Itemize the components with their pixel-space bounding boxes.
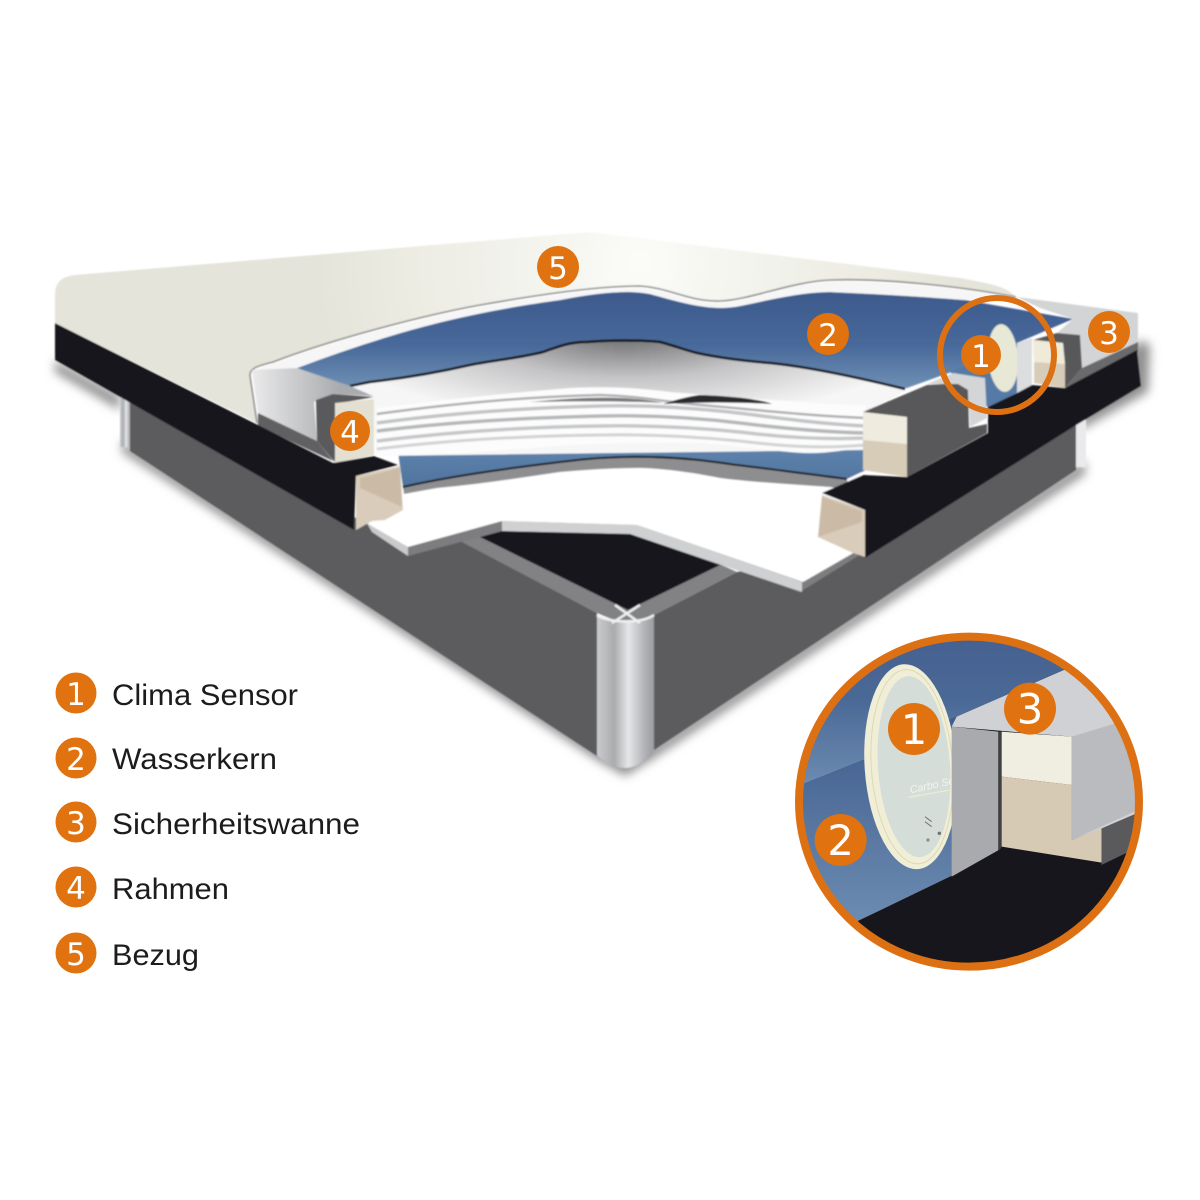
legend item 3: Sicherheitswanne <box>112 808 360 841</box>
inset dark block <box>1102 814 1134 865</box>
legend item 4: 4 <box>66 871 86 907</box>
black floor <box>480 531 720 610</box>
badge 2 <box>807 313 849 355</box>
left black band <box>55 323 398 530</box>
detail inset circle <box>795 632 1143 971</box>
left tan channel <box>356 466 403 530</box>
legend item 1: 1 <box>66 677 86 713</box>
inset tan face <box>1002 777 1102 863</box>
inset badge 2: 2 <box>827 816 854 865</box>
base shadow <box>55 340 1150 776</box>
inset clima sensor <box>864 664 952 870</box>
legend item 1: Clima Sensor <box>112 679 298 712</box>
lower water core <box>398 445 866 487</box>
right black band <box>822 350 1141 558</box>
inset background <box>804 670 1126 922</box>
badge 2: 2 <box>818 318 838 354</box>
badge 1 <box>961 335 1001 375</box>
inset badge 1: 1 <box>901 705 927 754</box>
badge 5: 5 <box>548 251 568 287</box>
right base wall <box>654 425 1076 750</box>
legend item 1 <box>56 672 298 714</box>
inset grey panel left <box>952 727 998 877</box>
badge 4: 4 <box>340 415 360 451</box>
badge 4 <box>330 411 370 451</box>
lower mattress edge <box>403 457 850 494</box>
inset blue lower band <box>803 716 957 921</box>
frame block: back right <box>1033 333 1082 388</box>
inset orange ring <box>799 637 1139 967</box>
inset black band <box>858 849 1126 921</box>
badge 3: 3 <box>1099 316 1119 352</box>
back silver rail <box>1017 297 1138 368</box>
foam board <box>365 458 862 592</box>
left corner post <box>120 392 131 447</box>
legend item 5: 5 <box>66 937 86 973</box>
legend <box>56 672 360 974</box>
small clima sensor <box>986 323 1032 393</box>
right corner post <box>1074 420 1086 467</box>
inset blue upper band <box>804 640 1064 784</box>
legend item 3 <box>56 802 360 842</box>
badge 1: 1 <box>971 339 991 375</box>
legend item 5: Bezug <box>112 939 199 972</box>
inset badge 1 <box>888 703 940 755</box>
left front rail <box>252 368 373 441</box>
frame block: left <box>316 394 374 463</box>
inset cream face <box>1002 732 1072 785</box>
legend item 5 <box>56 932 199 974</box>
upper water core <box>297 292 1073 388</box>
inner base lip <box>458 526 737 625</box>
legend item 2: Wasserkern <box>112 743 277 776</box>
inset grey rail top <box>952 670 1135 840</box>
water mattress layers <box>350 340 907 456</box>
small detail ring <box>940 298 1054 412</box>
waterbed cutaway illustration <box>55 232 1150 776</box>
right tan channel <box>818 495 865 557</box>
legend item 2: 2 <box>66 742 86 778</box>
mattress cover <box>55 232 1016 423</box>
inset badge 3 <box>1004 683 1056 735</box>
front corner post <box>597 605 654 768</box>
inset clima sensor: Carbo Sen <box>909 774 961 796</box>
water behind sensor <box>950 340 1032 408</box>
legend item 2 <box>56 738 277 778</box>
inset badge 3: 3 <box>1017 685 1043 734</box>
legend item 4: Rahmen <box>112 873 229 906</box>
inset grey panel right <box>1072 724 1135 840</box>
inset badge 2 <box>815 814 867 866</box>
legend item 3: 3 <box>66 806 86 842</box>
badge 5 <box>537 246 579 288</box>
frame block: front right <box>863 373 987 477</box>
legend item 4 <box>56 866 229 908</box>
badge 3 <box>1088 311 1130 353</box>
left base wall <box>130 400 597 756</box>
